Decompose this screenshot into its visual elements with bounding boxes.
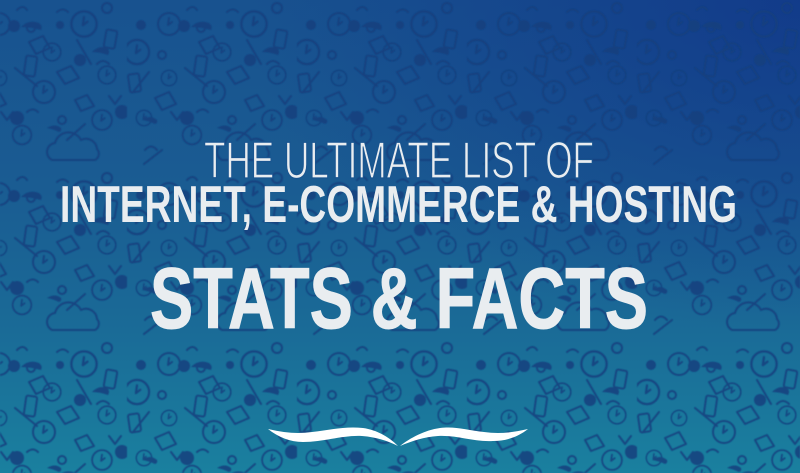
icon: white open-book swoosh divider [268,427,528,446]
title: the ultimate list of: THE ULTIMATE LIST OF [204,132,594,190]
heading: stats and facts: STATS & FACTS [150,251,648,347]
